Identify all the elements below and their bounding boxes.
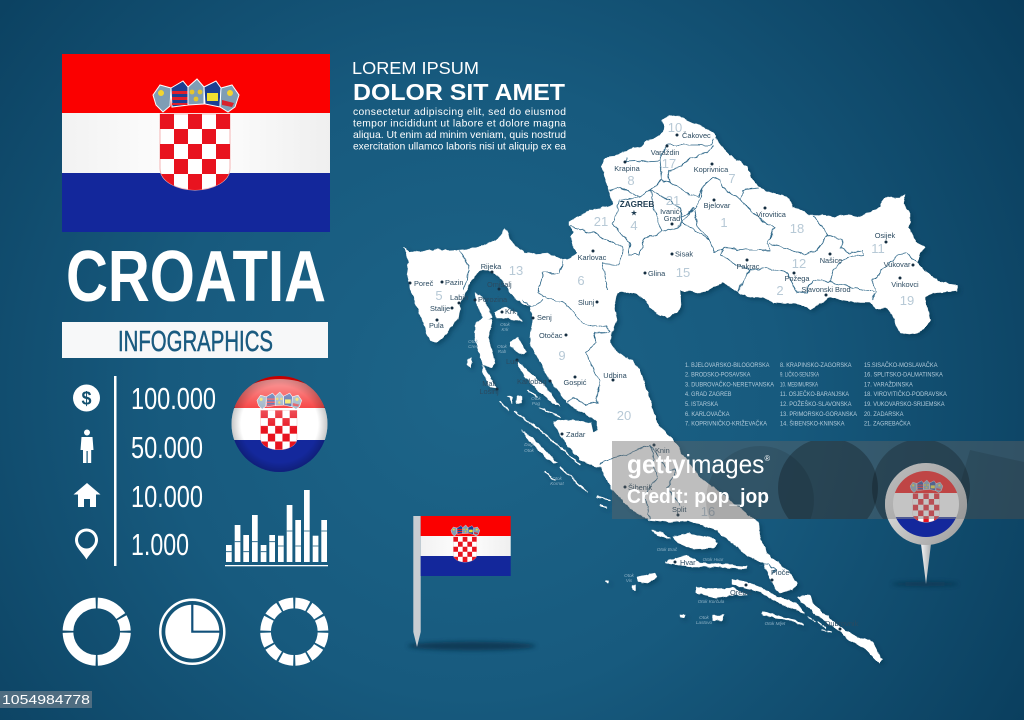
heading line 1: LOREM IPSUM: [352, 58, 479, 78]
city names: ★: [630, 208, 638, 218]
stat: 50.000: 50.000: [131, 430, 203, 465]
pin needle: [921, 544, 931, 584]
region numbers: 16: [701, 504, 715, 519]
region numbers: 12: [792, 256, 806, 271]
island names: Otok: [497, 344, 508, 349]
island names: Otok: [500, 322, 511, 327]
pole: [413, 516, 421, 647]
round flag badge: [231, 376, 328, 472]
city names: Karlovac: [578, 253, 607, 262]
county legend: 18. VIROVITIČKO-PODRAVSKA: [864, 389, 947, 398]
island names: Dugi: [524, 442, 535, 447]
pin ring: [885, 463, 967, 545]
county legend: 3. DUBROVAČKO-NERETVANSKA: [685, 380, 775, 388]
region numbers: 20: [617, 408, 631, 423]
city names: Slavonski Brod: [801, 285, 851, 294]
image id badge: 1054984778: [2, 693, 90, 707]
icon: person: [80, 430, 94, 463]
city names: Varaždin: [651, 148, 679, 157]
watermark banner backing: [612, 441, 1024, 519]
city names: Hvar: [680, 558, 696, 567]
island names: Otok: [468, 339, 479, 344]
county legend: 5. ISTARSKA: [685, 401, 719, 408]
main flag of Croatia: [62, 54, 330, 232]
county legend: 2. BRODSKO-POSAVSKA: [685, 372, 751, 378]
region numbers: 19: [900, 293, 914, 308]
intro paragraph: exercitation ullamco laboris nisi ut aliquip ex ea: [353, 142, 566, 152]
heading and intro text: [352, 58, 566, 152]
subtitle band: INFOGRAPHICS: [62, 322, 328, 358]
island names: Rab: [498, 349, 507, 354]
city names: ZAGREB: [620, 200, 654, 209]
region numbers: 1: [720, 215, 728, 230]
city names: Gospić: [563, 378, 587, 387]
island names: Otok: [531, 396, 542, 401]
region numbers: 6: [577, 273, 585, 288]
island names: Kornat: [550, 481, 564, 486]
city names: Pazin: [445, 278, 464, 287]
island names: Krk: [502, 327, 509, 332]
county legend: 21. ZAGREBAČKA: [864, 418, 911, 428]
watermark text: gettyimages: [627, 449, 769, 479]
county legend: 8. KRAPINSKO-ZAGORSKA: [780, 362, 852, 369]
island names: Otok Mljet: [765, 621, 786, 626]
county legend: 11. OSJEČKO-BARANJSKA: [780, 389, 849, 398]
island names: Otok Brač: [657, 547, 678, 552]
watermark wash over pin: [885, 463, 967, 519]
city names: Čakovec: [682, 131, 711, 140]
region numbers: 11: [871, 241, 885, 256]
city names: Zadar: [566, 430, 586, 439]
city names: Omišalj: [487, 280, 512, 289]
county legend: 17. VARAŽDINSKA: [864, 380, 913, 388]
region numbers: 8: [627, 173, 635, 188]
island names: [468, 322, 786, 626]
city names: Lošinj: [479, 387, 499, 396]
city names: Vukovar: [884, 260, 911, 269]
county legend: 15.SISAČKO-MOSLAVAČKA: [864, 360, 938, 369]
image id badge: [0, 691, 92, 708]
county legend: 20. ZADARSKA: [864, 411, 904, 418]
bar chart: [225, 490, 328, 566]
island names: Pag: [532, 401, 541, 406]
map pin with round flag: [885, 463, 967, 586]
city names: Osijek: [875, 231, 896, 240]
city names: Grad: [664, 214, 680, 223]
flag: [421, 516, 511, 576]
island names: Otok Korčula: [698, 599, 725, 604]
stat: 100.000: 100.000: [131, 381, 216, 416]
intro paragraph: consectetur adipiscing elit, sed do eiusmod: [353, 107, 566, 118]
region numbers: 10: [668, 120, 682, 135]
pole shadow: [408, 642, 536, 650]
city names: Udbina: [603, 371, 628, 380]
stat: 10.000: 10.000: [131, 479, 203, 514]
pin shadow: [892, 582, 958, 586]
flag on a pole: [408, 516, 536, 650]
region numbers: 17: [662, 156, 676, 171]
divider: [114, 376, 116, 566]
city names: Orebić: [730, 588, 752, 597]
region numbers: [435, 120, 914, 519]
city names: Mali: [482, 379, 496, 388]
pie chart: [160, 600, 224, 664]
county legend: 6. KARLOVAČKA: [685, 409, 730, 418]
intro paragraph: tempor incididunt ut labore et dolore magna: [353, 118, 566, 130]
city names: Pakrac: [736, 262, 760, 271]
pin flag: [893, 471, 959, 537]
city names: Rijeka: [481, 262, 502, 271]
city names: Split: [672, 505, 686, 514]
city names: Šibenik: [628, 483, 653, 492]
city names: Ivanić-: [660, 207, 682, 216]
city names: Virovitica: [756, 210, 787, 219]
region numbers: 21: [666, 193, 680, 208]
county legend: 7. KOPRIVNIČKO-KRIŽEVAČKA: [685, 418, 768, 428]
city names: Koprivnica: [694, 165, 729, 174]
county legend: [685, 360, 947, 428]
intro paragraph: aliqua. Ut enim ad minim veniam, quis nostrud: [353, 130, 566, 141]
island names: Otok Hvar: [703, 557, 724, 562]
stats panel: [73, 376, 216, 566]
city names: Našice: [820, 256, 842, 265]
county legend: 10. MEĐIMURSKA: [780, 382, 818, 388]
region numbers: 5: [435, 288, 443, 303]
county legend: 1. BJELOVARSKO-BILOGORSKA: [685, 362, 770, 369]
city markers: [408, 134, 914, 630]
city names: Pula: [429, 321, 445, 330]
county legend: 9. LIČKO-SENJSKA: [780, 370, 819, 378]
island names: Cres: [468, 344, 479, 349]
donut chart: twelve segments: [266, 603, 323, 660]
county legend: 16. SPLITSKO-DALMATINSKA: [864, 372, 943, 378]
city names: Labin: [450, 293, 468, 302]
city names: Ploče: [771, 568, 790, 577]
county legend: 12. POŽEŠKO-SLAVONSKA: [780, 399, 852, 408]
city names: [414, 131, 919, 628]
intro paragraph: [353, 107, 566, 152]
region numbers: 13: [509, 263, 523, 278]
land and islands: [404, 115, 957, 663]
region numbers: 4: [630, 218, 638, 233]
city names: Slunj: [578, 298, 595, 307]
city names: Krk: [505, 307, 516, 316]
map of Croatia: [404, 115, 957, 663]
island names: Vis: [626, 578, 633, 583]
city names: Senj: [537, 313, 552, 322]
county legend: 19. VUKOVARSKO-SRIJEMSKA: [864, 401, 945, 408]
region numbers: 21: [594, 214, 608, 229]
island names: Otok: [699, 615, 710, 620]
icon: dollar coin: $: [81, 388, 92, 408]
region numbers: 18: [790, 221, 804, 236]
watermark text: ®: [764, 454, 770, 463]
icon: dollar coin: [73, 384, 100, 412]
island names: Otok: [524, 448, 535, 453]
region numbers: 9: [558, 348, 566, 363]
county borders: [460, 138, 917, 574]
city names: Glina: [648, 269, 666, 278]
city names: Stalije: [430, 304, 450, 313]
stat: 1.000: 1.000: [131, 527, 189, 562]
island names: Otok: [552, 476, 563, 481]
heading line 2: DOLOR SIT AMET: [353, 79, 565, 105]
county legend: 14. ŠIBENSKO-KNINSKA: [780, 418, 845, 428]
region numbers: 2: [776, 283, 784, 298]
icon: house: [74, 483, 100, 507]
city names: Krapina: [614, 164, 641, 173]
city names: Porozina: [478, 295, 508, 304]
subtitle band: INFOGRAPHICS: INFOGRAPHICS: [118, 326, 273, 358]
credit text: Credit: pop_jop: [627, 486, 769, 508]
city names: Sisak: [675, 250, 693, 258]
city names: Bjelovar: [704, 201, 731, 210]
city names: Otočac: [539, 331, 563, 340]
city names: Poreč: [414, 279, 434, 288]
donut chart: segmented ring: [68, 603, 125, 660]
city names: Karlobag: [517, 377, 547, 386]
island names: Lastovo: [696, 620, 712, 625]
island names: Otok: [624, 573, 635, 578]
region numbers: 15: [676, 265, 690, 280]
city names: Knin: [655, 446, 670, 455]
county legend: 4. GRAD ZAGREB: [685, 391, 732, 398]
city names: Lun: [506, 357, 518, 366]
city names: Dubrovnik: [825, 619, 859, 628]
icon: location pin: [75, 529, 98, 560]
county legend: 13. PRIMORSKO-GORANSKA: [780, 411, 858, 418]
city names: Požega: [784, 274, 810, 283]
region numbers: 7: [728, 171, 736, 186]
title: CROATIA: CROATIA: [66, 236, 326, 317]
city names: Vinkovci: [891, 280, 919, 289]
